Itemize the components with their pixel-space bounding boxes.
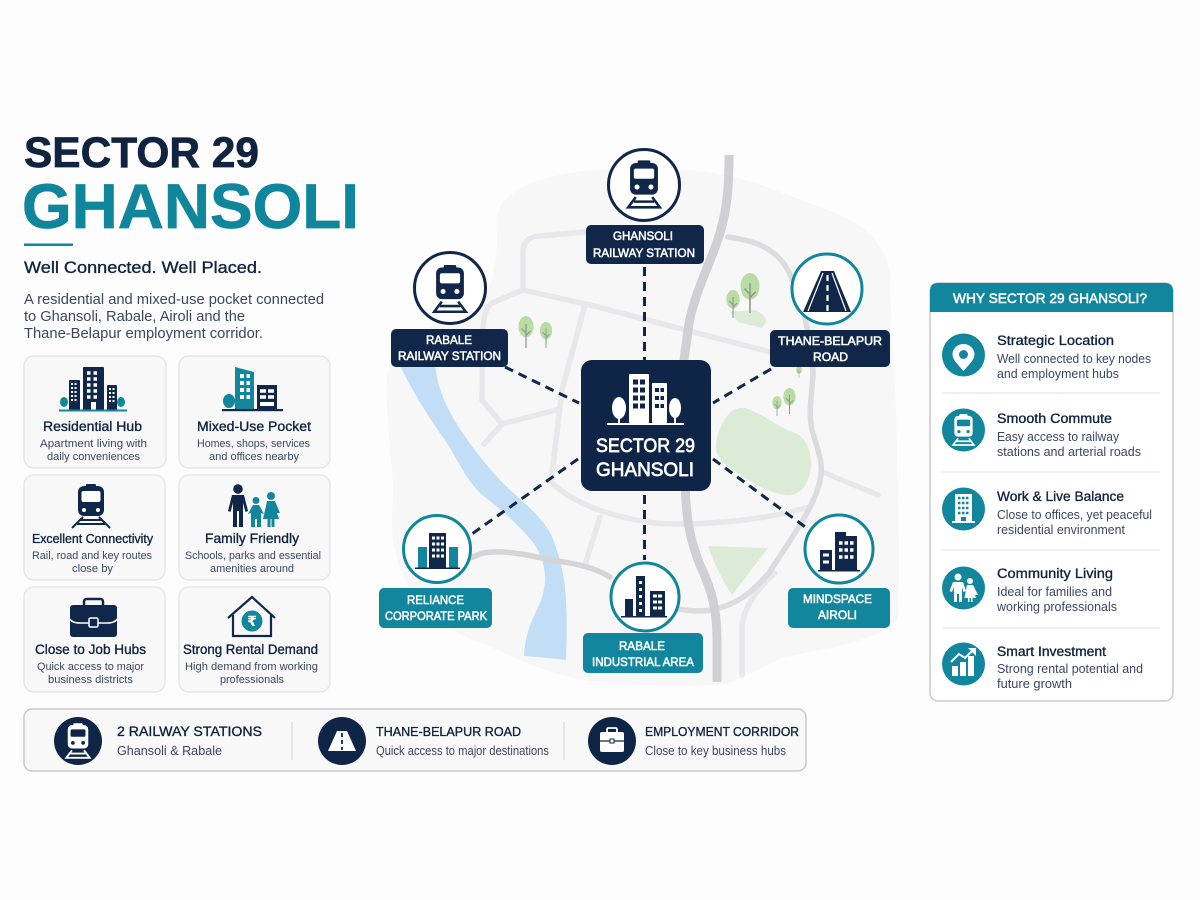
node: reliance corporate park: CORPORATE PARK (385, 611, 487, 623)
node: ghansoli railway station (586, 150, 704, 264)
node: thane-belapur road (770, 254, 890, 367)
card: mixed-use pocket: and offices nearby (209, 451, 299, 463)
icon: location pin (952, 344, 974, 371)
item: smart investment: future growth (997, 677, 1072, 691)
node: centre sector 29 ghansoli: SECTOR 29 (596, 435, 695, 457)
node: mindspace airoli: AIROLI (818, 610, 857, 622)
node: thane-belapur road: ROAD (813, 352, 848, 364)
icon: industrial buildings (621, 576, 667, 618)
icon: two people (950, 574, 978, 602)
card: close to job hubs (24, 587, 165, 692)
item: work and live balance: Close to offices, yet peaceful (997, 508, 1152, 522)
card: residential hub: Residential Hub (43, 419, 142, 434)
river (400, 366, 567, 660)
node: mindspace airoli: MINDSPACE (803, 594, 872, 606)
item: work and live balance: Work & Live Balance (997, 489, 1124, 504)
item: community living: Community Living (997, 566, 1113, 581)
card: family friendly: Family Friendly (205, 530, 299, 546)
node: thane-belapur road: THANE-BELAPUR (778, 336, 882, 348)
description (24, 292, 324, 342)
card: strong rental demand: High demand from working (185, 661, 318, 673)
icon: train on tracks (72, 484, 110, 528)
panel: feature cards (24, 356, 330, 692)
panel header (930, 283, 1173, 312)
icon: briefcase (600, 728, 624, 752)
card: close to job hubs: business districts (48, 674, 133, 686)
item: smart investment (942, 642, 1143, 691)
card: excellent connectivity: close by (72, 563, 114, 575)
highlight: employment corridor: Close to key business hubs (645, 744, 786, 758)
highlight: railway stations: Ghansoli & Rabale (117, 744, 222, 758)
node: centre sector 29 ghansoli (581, 360, 711, 491)
item: community living: Ideal for families and (997, 585, 1112, 599)
icon: office block (952, 494, 975, 523)
item: smart investment: Smart Investment (997, 644, 1106, 659)
item: smooth commute: Easy access to railway (997, 430, 1120, 444)
item: smooth commute (942, 408, 1141, 459)
panel: why sector 29 ghansoli (930, 283, 1173, 701)
node: centre sector 29 ghansoli: GHANSOLI (596, 459, 694, 481)
node: reliance corporate park: RELIANCE (407, 595, 464, 607)
card: close to job hubs: Quick access to major (37, 661, 144, 673)
panel: bottom highlights bar (24, 709, 806, 771)
node: rabale industrial area (583, 563, 703, 673)
highlight: thane-belapur road: THANE-BELAPUR ROAD (376, 724, 521, 739)
highlight: thane-belapur road: Quick access to major destinations (376, 744, 549, 758)
icon: buildings and trees (607, 374, 684, 425)
roads (470, 155, 878, 682)
highlight: thane-belapur road (318, 717, 549, 765)
card: residential hub: Apartment living with (40, 438, 147, 450)
highlight: employment corridor (588, 717, 799, 765)
icon: road (328, 731, 356, 751)
icon: office towers (415, 533, 460, 569)
item: smooth commute: Smooth Commute (997, 411, 1112, 426)
icon: house with rupee (228, 597, 275, 636)
icon: family (228, 484, 280, 527)
card: excellent connectivity: Rail, road and key routes (32, 550, 152, 562)
icon: road (803, 271, 851, 312)
node: ghansoli railway station: RAILWAY STATION (593, 248, 695, 260)
card: mixed-use pocket: Homes, shops, services (197, 438, 310, 450)
panel header: WHY SECTOR 29 GHANSOLI? (953, 291, 1147, 306)
item: work and live balance (942, 488, 1152, 537)
card: excellent connectivity (24, 475, 165, 580)
icon: residential buildings (59, 367, 127, 412)
node: mindspace airoli (788, 515, 890, 628)
node: rabale railway station (391, 252, 508, 367)
icon: growth chart (951, 648, 976, 676)
node: rabale industrial area: INDUSTRIAL AREA (592, 657, 694, 669)
description: to Ghansoli, Rabale, Airoli and the (24, 309, 245, 325)
card: family friendly: Schools, parks and essential (185, 550, 321, 562)
item: strategic location: Strategic Location (997, 333, 1114, 348)
trees (518, 273, 802, 416)
item: work and live balance: residential environment (997, 523, 1126, 537)
description: Thane-Belapur employment corridor. (24, 326, 263, 342)
card: mixed-use pocket: Mixed-Use Pocket (197, 419, 311, 434)
item: community living: working professionals (996, 600, 1117, 614)
node: ghansoli railway station: GHANSOLI (613, 231, 673, 243)
description: A residential and mixed-use pocket connected (24, 292, 324, 308)
card: residential hub: daily conveniences (47, 451, 140, 463)
item: strategic location: Well connected to key nodes (997, 352, 1151, 366)
card: close to job hubs: Close to Job Hubs (35, 641, 146, 657)
title: GHANSOLI (22, 172, 359, 242)
highlight: railway stations: 2 RAILWAY STATIONS (117, 724, 262, 739)
card: family friendly: amenities around (210, 563, 294, 575)
icon: mixed-use buildings (222, 367, 283, 411)
title (22, 129, 359, 242)
node: rabale industrial area: RABALE (619, 641, 665, 653)
icon: house with rupee: ₹ (247, 613, 257, 629)
parks (708, 310, 811, 595)
icon: briefcase (70, 599, 117, 637)
item: smooth commute: stations and arterial roads (997, 445, 1141, 459)
item: strategic location: and employment hubs (997, 367, 1119, 381)
card: mixed-use pocket (179, 356, 330, 468)
highlight: railway stations (54, 717, 262, 765)
item: smart investment: Strong rental potential and (997, 662, 1143, 676)
node: rabale railway station: RABALE (426, 335, 472, 347)
node: reliance corporate park (379, 516, 492, 628)
card: residential hub (24, 356, 166, 468)
map background (386, 168, 899, 686)
icon: office blocks (818, 532, 860, 572)
card: strong rental demand: professionals (220, 674, 284, 686)
connector lines (469, 267, 808, 560)
highlight: employment corridor: EMPLOYMENT CORRIDOR (645, 724, 799, 739)
card: excellent connectivity: Excellent Connectivity (32, 531, 153, 546)
title: SECTOR 29 (24, 129, 259, 177)
item: community living (942, 566, 1117, 614)
tagline: Well Connected. Well Placed. (24, 258, 262, 277)
map (379, 150, 899, 686)
card: strong rental demand (179, 587, 330, 692)
card: strong rental demand: Strong Rental Demand (183, 642, 318, 657)
item: strategic location (942, 333, 1151, 381)
card: family friendly (179, 475, 330, 580)
node: rabale railway station: RAILWAY STATION (398, 351, 501, 363)
